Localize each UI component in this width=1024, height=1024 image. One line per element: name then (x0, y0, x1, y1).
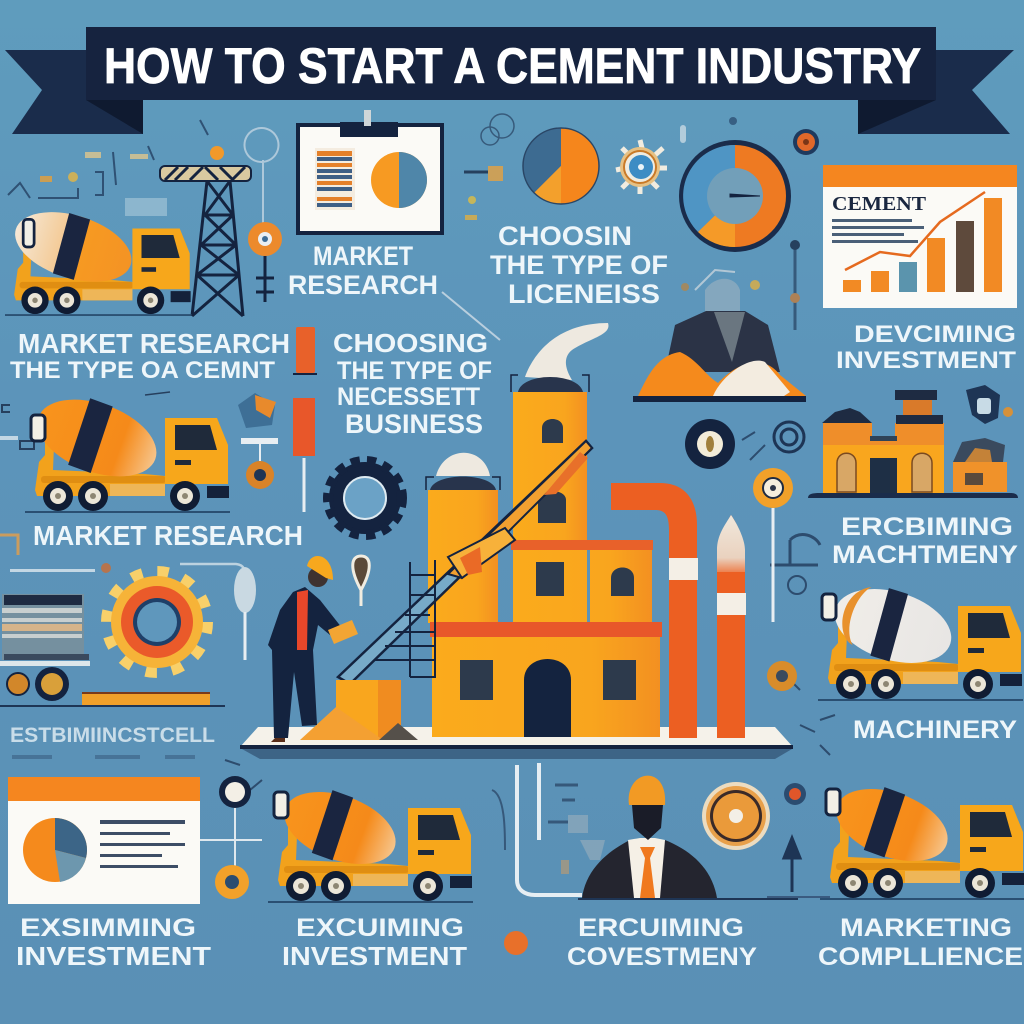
label: choosing the type of license (490, 221, 668, 309)
gear icon dark (328, 461, 402, 535)
small badge icon (793, 129, 819, 155)
icon: ring target (685, 419, 735, 469)
badge icon orange (248, 222, 282, 302)
truck 4: orange mixer (268, 777, 473, 903)
cement plant (240, 323, 793, 759)
label: marketing compliance: COMPLLIENCE (818, 943, 1023, 971)
chimney (717, 515, 746, 738)
worker figure (0, 0, 358, 742)
dark badge icon (966, 385, 1013, 424)
middle block (511, 540, 653, 623)
label: choosing the type of necessary business: NECESSETT (337, 383, 480, 411)
label: estimating machinery: MACHTMENY (832, 541, 1018, 569)
left silo (426, 453, 500, 623)
panel: industry pie report (8, 777, 200, 904)
small nut icon (767, 661, 797, 691)
location pin icon (353, 556, 369, 606)
white lamp icon (234, 567, 256, 660)
label: excuiming investment: INVESTMENT (282, 941, 467, 971)
coin marker on pole (753, 468, 793, 622)
label: estimating investment: INVESTMENT (16, 941, 211, 971)
label: market research: MARKET RESEARCH (33, 520, 303, 551)
label: market research: MARKET (313, 241, 413, 271)
small plant icon (808, 390, 1018, 498)
small machine icon (953, 438, 1007, 492)
label: ercuiming covestmeny (567, 914, 757, 971)
miner figure and cement pile (633, 279, 806, 402)
small market icon (238, 393, 276, 428)
label: choosing the type of necessary business (333, 328, 492, 439)
label: estimating machinery (832, 513, 1018, 569)
label: excuiming investment (282, 914, 467, 971)
pipe connector lines (517, 763, 582, 895)
panel: market research clipboard (298, 110, 442, 233)
title text: HOW TO START A CEMENT INDUSTRY (104, 38, 921, 94)
orange thermometer marker (293, 398, 315, 512)
panel: cement growth chart (823, 165, 1017, 308)
transmission tower (160, 146, 251, 316)
gauge dial (679, 140, 791, 252)
label: choosing the type of necessary business: BUSINESS (345, 409, 483, 439)
label: market research the type of cement: THE TYPE OA CEMNT (10, 357, 275, 384)
small pin (784, 783, 806, 892)
label: excuiming investment: EXCUIMING (296, 914, 464, 942)
machine body (0, 594, 90, 666)
connector with coin icons (200, 776, 262, 899)
cement cube and pile (300, 680, 418, 740)
small coin icon (241, 438, 278, 489)
label: market research (288, 241, 438, 300)
label: marketing compliance: MARKETING (840, 914, 1012, 942)
label: ercuiming covestmeny: ERCUIMING (578, 914, 744, 942)
label: estimating investment: EXSIMMING (20, 914, 196, 942)
truck 1: white and orange mixer (5, 199, 192, 316)
label: determining investment: DEVCIMING (854, 321, 1016, 348)
label: choosing the type of license: LICENEISS (508, 279, 660, 309)
businessman bust (578, 776, 798, 900)
icon: sun gear (616, 140, 667, 194)
label: machinery: MACHINERY (853, 716, 1017, 744)
label: market research the type of cement: MARKET RESEARCH (18, 328, 290, 359)
truck 2: orange mixer (25, 384, 230, 513)
label: choosing the type of necessary business: THE TYPE OF (337, 357, 492, 385)
large gear (108, 573, 206, 671)
label: ercuiming covestmeny: COVESTMENY (567, 943, 757, 971)
label: estimating machinery: ERCBIMING (841, 513, 1013, 541)
panel: cement growth chart: CEMENT (832, 193, 927, 215)
label: choosing the type of license: CHOOSIN (498, 221, 632, 251)
title banner (5, 27, 1014, 134)
label: market research the type of cement (10, 328, 290, 384)
icon: ring small (774, 422, 804, 452)
target coin (702, 782, 770, 850)
label: marketing compliance (818, 914, 1023, 971)
truck 5: orange mixer (820, 774, 1024, 900)
orange bar marker (293, 327, 317, 375)
label: market research: RESEARCH (288, 270, 438, 300)
label: determining investment (836, 321, 1016, 374)
label: determining investment: INVESTMENT (836, 347, 1016, 374)
smoke plume (525, 323, 608, 380)
machine with gear (0, 573, 225, 707)
label: choosing the type of license: THE TYPE OF (490, 250, 668, 280)
label: estimating investment (16, 914, 211, 971)
pipe (611, 483, 698, 738)
stairs conveyor (338, 441, 592, 684)
pie chart icon (523, 128, 599, 204)
main building (430, 622, 662, 737)
label: estimating steel: ESTBIMIINCSTCELL (10, 724, 215, 747)
truck 3: white mixer (818, 575, 1023, 701)
platform (240, 727, 793, 759)
door (524, 659, 571, 737)
small orange dot icon (504, 931, 528, 955)
label: choosing the type of necessary business: CHOOSING (333, 328, 488, 358)
tall tower (511, 375, 589, 552)
